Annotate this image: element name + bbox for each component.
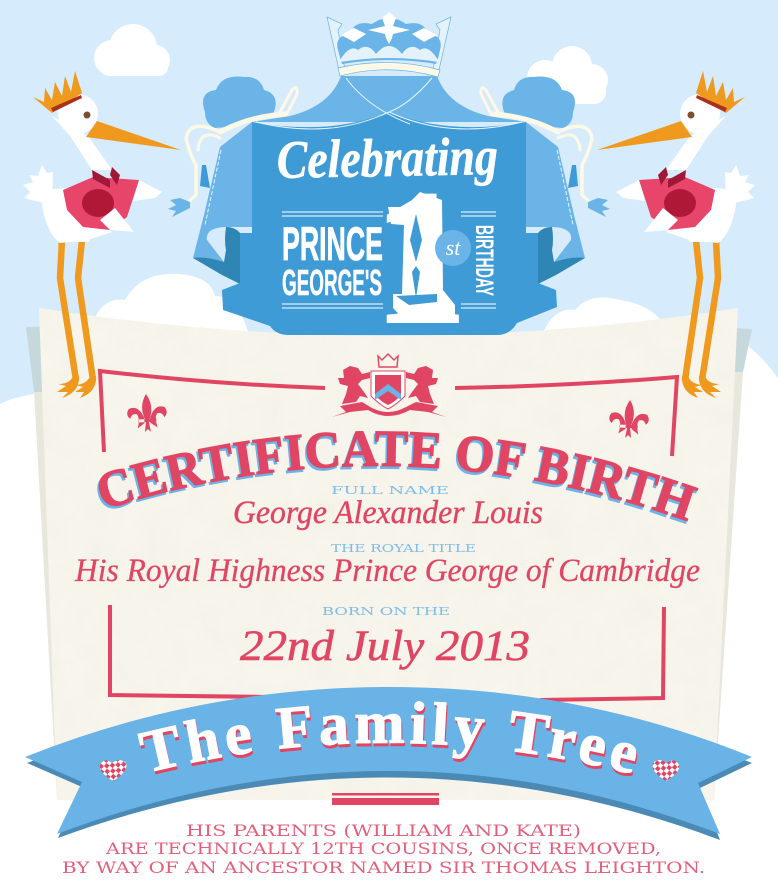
left tassel	[168, 198, 190, 217]
canopy seams	[256, 78, 522, 129]
chevron	[375, 384, 401, 400]
family tree ribbon	[25, 687, 752, 840]
right ribbon fold	[526, 122, 585, 262]
left stork	[23, 71, 181, 398]
crown band	[338, 62, 440, 77]
coat of arms	[332, 354, 446, 417]
body text: HIS PARENTS (WILLIAM AND KATE)	[186, 821, 581, 840]
blue canopy banner	[193, 76, 585, 335]
stork wing tip	[100, 208, 134, 232]
heading: Celebrating: Celebrating	[276, 126, 498, 190]
label: full name: FULL NAME	[331, 484, 449, 497]
fleur de lis right	[608, 399, 650, 439]
name: PRINCE: PRINCE	[282, 217, 383, 270]
ribbon face	[25, 687, 752, 834]
right rope	[481, 88, 592, 204]
ribbon stitching	[205, 150, 573, 225]
crown ornaments	[340, 12, 438, 62]
hanging tassels on ribbon	[200, 165, 578, 188]
ribbon shadow	[27, 695, 752, 840]
crown blue velvet	[337, 18, 441, 64]
left ribbon fold	[193, 122, 252, 262]
white lower area under ribbon	[0, 800, 778, 882]
paper certificate	[20, 300, 760, 810]
heart right	[653, 760, 679, 781]
canopy top	[252, 76, 526, 122]
certificate frame	[100, 371, 677, 700]
body text: BY WAY OF AN ANCESTOR NAMED SIR THOMAS LEIGHTON.	[62, 858, 705, 877]
heart left	[100, 760, 126, 781]
stork eye	[84, 112, 90, 118]
label: BIRTHDAY: BIRTHDAY	[470, 225, 498, 296]
value: date of birth: 22nd July 2013	[240, 623, 530, 670]
right lion	[406, 366, 438, 404]
white ground hills	[0, 330, 778, 882]
stork legs	[60, 240, 93, 380]
fleur de lis left	[126, 393, 168, 433]
stork crown	[33, 71, 82, 113]
back sheet of certificate	[26, 325, 752, 800]
value: full name: George Alexander Louis	[233, 495, 543, 531]
large crown	[327, 12, 451, 77]
stork collar	[92, 167, 120, 188]
value: royal title: His Royal Highness Prince George of Cambridge	[74, 553, 700, 589]
badge: st	[435, 230, 471, 266]
stork body	[23, 94, 162, 243]
numeral 1: 1	[371, 149, 469, 366]
rules beside PRINCE GEORGE'S	[282, 212, 496, 308]
clouds	[90, 24, 680, 340]
stork wing	[82, 189, 114, 217]
label: born on: BORN ON THE	[322, 605, 450, 618]
label: royal title: THE ROYAL TITLE	[331, 542, 476, 555]
body text	[62, 821, 705, 877]
right tassel	[588, 198, 610, 217]
left lion	[338, 366, 370, 404]
scroll	[332, 402, 446, 417]
shield	[371, 371, 405, 409]
ropes and tassels	[168, 88, 610, 217]
title: certificate of birth: CERTIFICATE OF BIRTH	[98, 431, 699, 522]
name: GEORGE'S: GEORGE'S	[282, 262, 382, 303]
left rope	[186, 88, 297, 204]
title shadow: CERTIFICATE OF BIRTH	[97, 434, 697, 524]
small crown	[378, 354, 398, 367]
body text: ARE TECHNICALLY 12TH COUSINS, ONCE REMOVED,	[105, 839, 661, 858]
ribbon shadow curls	[193, 227, 585, 284]
right stork	[597, 71, 755, 398]
ribbon title shadow: The Family Tree	[140, 705, 638, 776]
stork beak	[86, 121, 181, 150]
main banner body	[222, 112, 557, 335]
stork shirt	[63, 177, 139, 230]
blue puffs	[203, 77, 575, 128]
ribbon title: The Family Tree	[137, 701, 636, 773]
crown outline	[327, 17, 451, 70]
divider bars	[332, 793, 439, 805]
stork feet	[57, 376, 96, 398]
badge: st: st	[446, 235, 461, 260]
